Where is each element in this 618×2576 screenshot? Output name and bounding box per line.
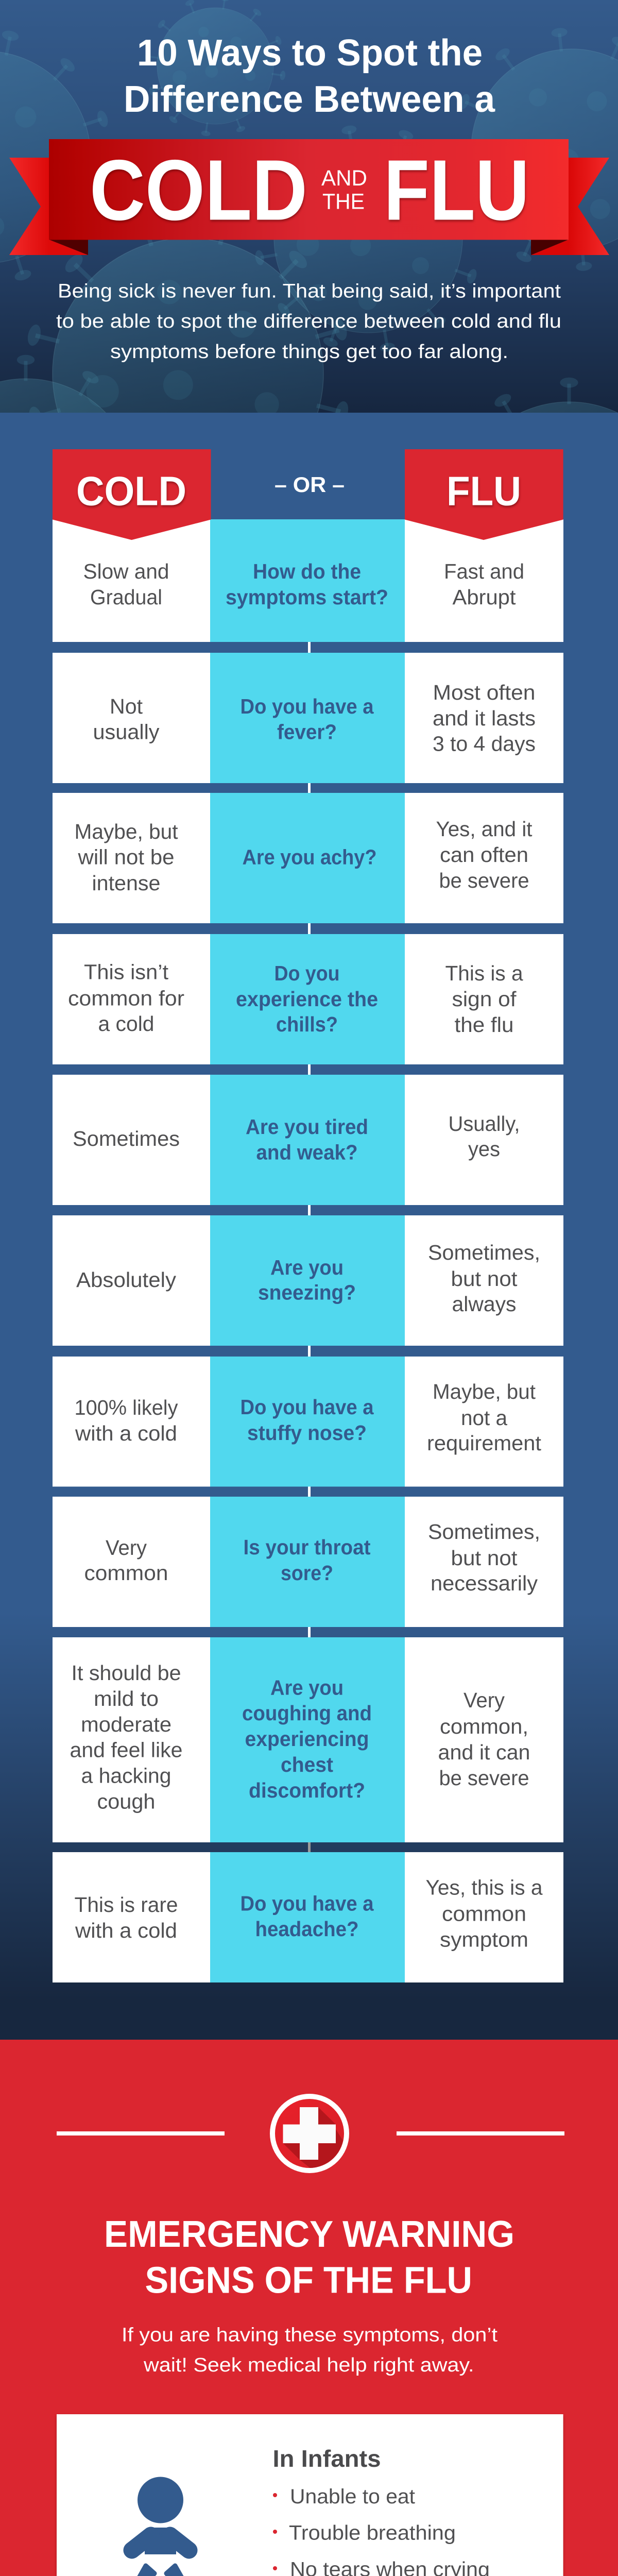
hero section bbox=[0, 0, 618, 413]
flu answer: and it lasts bbox=[433, 706, 536, 730]
row 9: coughing and chest discomfort bbox=[53, 1637, 563, 1842]
symptom list: Unable to eat bbox=[290, 2485, 415, 2508]
row 10: headache bbox=[53, 1852, 563, 1982]
question: stuffy nose? bbox=[247, 1421, 367, 1445]
flu answer: common, bbox=[440, 1715, 528, 1738]
question: Do you bbox=[274, 961, 340, 985]
cold answer: a hacking bbox=[81, 1764, 171, 1788]
cold answer: and feel like bbox=[70, 1738, 182, 1762]
question: discomfort? bbox=[249, 1778, 365, 1802]
flu answer: This is a bbox=[445, 961, 523, 985]
question: Is your throat bbox=[243, 1535, 371, 1559]
cold answer: Maybe, but bbox=[74, 820, 178, 843]
title: 10 Ways to Spot the bbox=[137, 32, 483, 74]
question: and weak? bbox=[256, 1141, 357, 1164]
cold answer bbox=[74, 1893, 178, 1942]
flu answer: be severe bbox=[439, 1766, 529, 1790]
cold answer: Very bbox=[106, 1536, 147, 1560]
cold answer: Not bbox=[110, 694, 143, 718]
panel: infants bbox=[57, 2414, 563, 2576]
flu answer bbox=[448, 1112, 520, 1161]
flu header: FLU bbox=[447, 468, 521, 514]
question: experiencing bbox=[245, 1727, 369, 1751]
flu answer bbox=[444, 560, 524, 609]
row 6: sneezing bbox=[53, 1215, 563, 1346]
question: fever? bbox=[277, 720, 337, 744]
question bbox=[246, 1115, 368, 1164]
flu answer: yes bbox=[468, 1137, 500, 1161]
question bbox=[242, 1675, 372, 1802]
ribbon band bbox=[49, 139, 569, 240]
question bbox=[243, 1535, 371, 1585]
cold answer bbox=[74, 1396, 178, 1445]
table background bbox=[0, 413, 618, 2040]
ribbon right tail bbox=[531, 158, 609, 255]
card background bbox=[57, 2414, 563, 2576]
cold answer: with a cold bbox=[75, 1421, 177, 1445]
intro paragraph bbox=[56, 280, 561, 363]
question: Do you have a bbox=[240, 694, 374, 718]
cold answer: a cold bbox=[98, 1012, 154, 1036]
ribbon left fold bbox=[49, 240, 88, 255]
question bbox=[240, 1395, 374, 1445]
flu answer bbox=[438, 1688, 530, 1790]
flu answer: requirement bbox=[427, 1431, 542, 1455]
red background bbox=[0, 2040, 618, 2576]
flu answer: Very bbox=[464, 1688, 505, 1712]
cold answer: with a cold bbox=[75, 1919, 177, 1942]
question bbox=[240, 1892, 374, 1941]
icon: baby bbox=[132, 2477, 189, 2576]
section heading bbox=[104, 2214, 514, 2301]
row 7: stuffy nose bbox=[53, 1357, 563, 1487]
question bbox=[258, 1256, 356, 1304]
icon: medical cross badge bbox=[270, 2094, 349, 2173]
question: Are you achy? bbox=[242, 845, 377, 869]
cold answer: It should be bbox=[71, 1661, 181, 1685]
question: chest bbox=[281, 1753, 333, 1776]
flu answer bbox=[428, 1241, 540, 1316]
flu answer: symptom bbox=[440, 1928, 528, 1952]
banner word: cold: COLD bbox=[90, 142, 307, 238]
row 3: achy bbox=[53, 793, 563, 923]
flu answer: necessarily bbox=[431, 1571, 538, 1595]
question: chills? bbox=[276, 1012, 338, 1036]
flu answer: the flu bbox=[454, 1013, 514, 1037]
question: experience the bbox=[236, 987, 378, 1011]
question: Are you bbox=[270, 1675, 344, 1699]
flu answer: be severe bbox=[439, 869, 529, 892]
question: symptoms start? bbox=[226, 585, 388, 609]
flu answer bbox=[445, 961, 523, 1037]
cold header bbox=[53, 449, 211, 540]
question bbox=[240, 694, 374, 744]
title bbox=[124, 32, 495, 120]
hero background bbox=[0, 0, 618, 413]
or divider: – OR – bbox=[274, 472, 345, 497]
flu answer: Most often bbox=[433, 681, 536, 704]
flu answer bbox=[436, 817, 533, 892]
virus background illustration bbox=[0, 0, 618, 653]
question bbox=[236, 961, 378, 1036]
flu answer: but not bbox=[451, 1546, 518, 1570]
flu answer bbox=[425, 1875, 543, 1952]
section heading: SIGNS OF THE FLU bbox=[145, 2260, 472, 2301]
banner word: flu: FLU bbox=[384, 142, 529, 238]
question: Do you have a bbox=[240, 1395, 374, 1419]
flu answer: Sometimes, bbox=[428, 1520, 540, 1544]
question: How do the bbox=[253, 560, 361, 583]
cold answer: common bbox=[84, 1561, 168, 1585]
ribbon banner bbox=[9, 139, 609, 255]
cold answer bbox=[83, 560, 169, 609]
question: headache? bbox=[255, 1917, 358, 1941]
banner words: and the: THE bbox=[322, 190, 365, 214]
question: Do you have a bbox=[240, 1892, 374, 1916]
flu answer: not a bbox=[461, 1406, 507, 1430]
cold answer: mild to bbox=[94, 1687, 159, 1710]
question: sneezing? bbox=[258, 1281, 356, 1304]
cold answer: Gradual bbox=[90, 585, 162, 609]
section heading: EMERGENCY WARNING bbox=[104, 2214, 514, 2255]
ribbon right fold bbox=[531, 240, 569, 255]
flu answer: always bbox=[452, 1292, 516, 1316]
flu answer: but not bbox=[451, 1267, 518, 1291]
cold answer: will not be bbox=[77, 845, 174, 869]
cold answer bbox=[74, 820, 178, 895]
divider right bbox=[397, 2131, 564, 2136]
flu answer: Abrupt bbox=[452, 585, 516, 609]
divider left bbox=[57, 2131, 225, 2136]
section subheading bbox=[122, 2325, 497, 2376]
ribbon left tail bbox=[9, 158, 88, 255]
title: Difference Between a bbox=[124, 79, 495, 120]
flu header bbox=[405, 449, 563, 540]
row 5: tired and weak bbox=[53, 1075, 563, 1205]
row 1: how do the symptoms start bbox=[53, 449, 563, 642]
flu answer: sign of bbox=[452, 987, 517, 1011]
question: sore? bbox=[281, 1561, 333, 1585]
cold answer: This isn’t bbox=[84, 960, 169, 984]
flu answer: can often bbox=[440, 843, 528, 867]
card heading: In Infants bbox=[273, 2445, 381, 2472]
cold answer bbox=[68, 960, 184, 1036]
cold answer bbox=[84, 1536, 168, 1585]
flu answer: Sometimes, bbox=[428, 1241, 540, 1264]
flu answer: Fast and bbox=[444, 560, 524, 583]
intro paragraph: to be able to spot the difference between cold and flu bbox=[56, 311, 561, 332]
cold answer: common for bbox=[68, 986, 184, 1010]
banner words: and the: AND bbox=[321, 166, 367, 191]
flu answer bbox=[428, 1520, 540, 1595]
intro paragraph: symptoms before things get too far along. bbox=[110, 341, 508, 363]
flu answer: common bbox=[442, 1902, 526, 1926]
cold answer: Slow and bbox=[83, 560, 169, 583]
cold answer: 100% likely bbox=[74, 1396, 178, 1419]
cold answer: cough bbox=[97, 1790, 156, 1814]
cold answer: Sometimes bbox=[73, 1127, 180, 1150]
banner words: and the bbox=[321, 166, 367, 214]
comparison table section bbox=[0, 413, 618, 2040]
cold header: COLD bbox=[76, 468, 186, 514]
row 8: sore throat bbox=[53, 1497, 563, 1627]
table row connectors bbox=[308, 642, 311, 1852]
section subheading: wait! Seek medical help right away. bbox=[143, 2354, 474, 2376]
cold answer bbox=[70, 1661, 182, 1814]
question: coughing and bbox=[242, 1701, 372, 1725]
question: Are you tired bbox=[246, 1115, 368, 1139]
cold answer: moderate bbox=[81, 1713, 171, 1736]
flu answer bbox=[427, 1380, 542, 1455]
row 4: chills bbox=[53, 934, 563, 1064]
flu answer bbox=[433, 681, 536, 755]
flu answer: 3 to 4 days bbox=[433, 732, 536, 755]
cold answer: This is rare bbox=[74, 1893, 178, 1917]
cold answer: usually bbox=[93, 720, 160, 744]
flu answer: Usually, bbox=[448, 1112, 520, 1136]
question: Are you bbox=[270, 1256, 344, 1279]
symptom list bbox=[273, 2485, 510, 2576]
flu answer: Yes, and it bbox=[436, 817, 533, 841]
intro paragraph: Being sick is never fun. That being said, it’s important bbox=[58, 280, 561, 302]
flu answer: Maybe, but bbox=[433, 1380, 536, 1403]
cold answer bbox=[93, 694, 160, 744]
flu answer: Yes, this is a bbox=[425, 1875, 543, 1899]
flu answer: and it can bbox=[438, 1740, 530, 1764]
cold answer: Absolutely bbox=[76, 1268, 177, 1292]
cold answer: intense bbox=[92, 871, 161, 895]
section subheading: If you are having these symptoms, don’t bbox=[122, 2325, 497, 2346]
emergency warning section bbox=[0, 2040, 618, 2576]
symptom list: Trouble breathing bbox=[289, 2521, 456, 2544]
row 2: fever bbox=[53, 653, 563, 783]
question bbox=[226, 560, 388, 609]
